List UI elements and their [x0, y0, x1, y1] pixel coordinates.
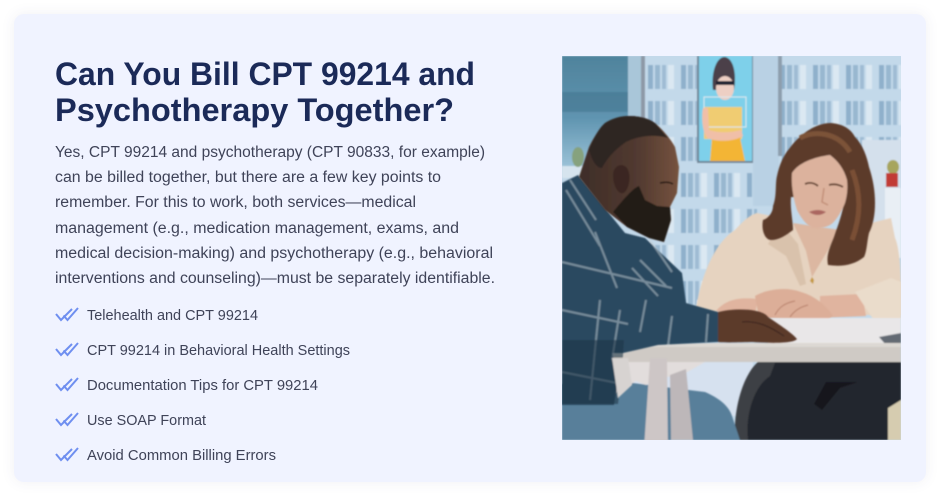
text block: intro paragraph: can be billed together, but there are a few key points to [55, 169, 441, 186]
person: man [562, 116, 797, 405]
title: Psychotherapy Together? [55, 92, 454, 128]
person: woman [695, 123, 901, 321]
text block: intro paragraph: interventions and counseling)—must be separately identifiable. [55, 270, 495, 287]
text block: intro paragraph: remember. For this to work, both services—medical [55, 194, 416, 211]
plant pot [886, 160, 899, 187]
text block: intro paragraph: management (e.g., medication management, exams, and [55, 220, 459, 237]
text block: intro paragraph [55, 144, 495, 287]
item: SOAP: Use SOAP Format [87, 413, 206, 429]
text block: intro paragraph: medical decision-making) and psychotherapy (e.g., behavioral [55, 245, 493, 262]
item: Telehealth: Telehealth and CPT 99214 [87, 308, 258, 324]
checklist [56, 308, 350, 464]
text block: intro paragraph: Yes, CPT 99214 and psychotherapy (CPT 90833, for example) [55, 144, 485, 161]
item: Billing Errors: Avoid Common Billing Errors [87, 448, 276, 464]
title [55, 56, 475, 128]
photo: two people at a table [562, 56, 901, 448]
item: Behavioral Health: CPT 99214 in Behavioral Health Settings [87, 343, 350, 359]
title: Can You Bill CPT 99214 and [55, 56, 475, 92]
billboard [697, 56, 753, 163]
item: Documentation Tips: Documentation Tips for CPT 99214 [87, 378, 318, 394]
table and objects [562, 318, 901, 448]
